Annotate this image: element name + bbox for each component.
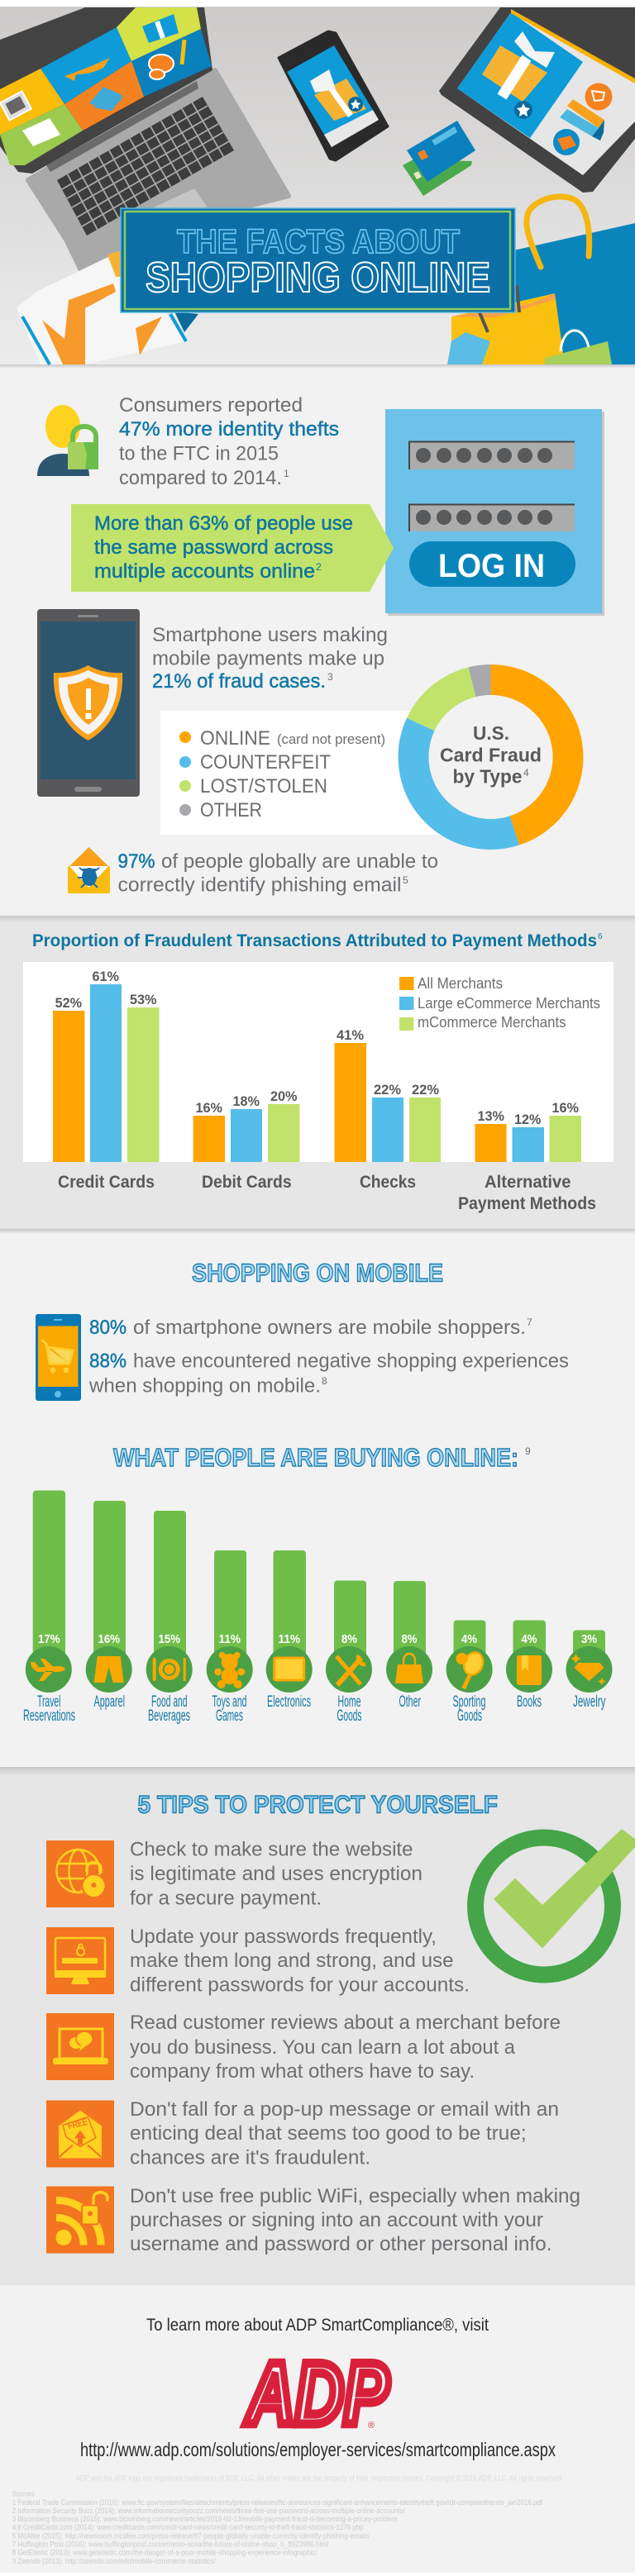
bar: apparel bbox=[86, 1501, 132, 1711]
group: checks: 22% bbox=[412, 1082, 439, 1098]
callout: password reuse arrow: the same password across bbox=[94, 536, 333, 559]
text: mobile payments fraud: Smartphone users making bbox=[152, 624, 388, 646]
tip text: chances are it's fraudulent. bbox=[130, 2147, 370, 2169]
text: identity thefts bbox=[119, 394, 339, 489]
text: identity thefts: 47% more identity thefts bbox=[119, 418, 339, 440]
tip text: you do business. You can learn a lot about a bbox=[130, 2036, 516, 2059]
tip text bbox=[130, 2185, 580, 2255]
bar: sporting goods: Sporting bbox=[453, 1693, 486, 1711]
tip text bbox=[130, 2098, 559, 2169]
icon: phone with warning shield bbox=[37, 609, 140, 797]
log in button: LOG IN bbox=[438, 548, 545, 584]
text: identity thefts: Consumers reported bbox=[119, 394, 303, 417]
bar: toys: 11% bbox=[218, 1632, 241, 1646]
heading: shopping on mobile: SHOPPING ON MOBILE bbox=[192, 1258, 443, 1288]
panel: card fraud legend: LOST/STOLEN bbox=[200, 775, 327, 798]
text: phishing: of people globally are unable to bbox=[161, 850, 438, 873]
panel: card fraud legend: ONLINE bbox=[200, 727, 270, 750]
tip 5 bbox=[46, 2185, 580, 2255]
bar: toys: Toys and bbox=[212, 1693, 246, 1711]
text: sources: 8 GetElastic (2013): www.getelastic.com/the-danger-of-a-poor-mobile-shopping-experience-infographic/ bbox=[12, 2549, 318, 2558]
donut chart: US card fraud by type bbox=[413, 679, 568, 834]
donut chart: US card fraud by type: Card Fraud bbox=[440, 744, 542, 765]
donut chart: US card fraud by type: by Type bbox=[453, 765, 523, 787]
group: alternative payment methods: 13% bbox=[478, 1108, 504, 1124]
bar: toys bbox=[207, 1550, 253, 1725]
bar: jewelry: Jewelry bbox=[573, 1693, 606, 1711]
bar: electronics bbox=[266, 1550, 313, 1711]
text: identity thefts: compared to 2014. bbox=[119, 467, 282, 489]
heading: proportion of fraudulent transactions: Proportion of Fraudulent Transactions Attributed to Payment Methods bbox=[32, 931, 597, 950]
title line 1: THE FACTS ABOUT bbox=[177, 222, 460, 260]
heading: what people are buying online: 9 bbox=[525, 1445, 531, 1457]
group: debit cards: Debit Cards bbox=[202, 1173, 292, 1192]
bar: home goods bbox=[326, 1580, 372, 1725]
text: identity thefts: 1 bbox=[284, 468, 289, 479]
group: credit cards: Credit Cards bbox=[58, 1173, 155, 1192]
tablet bbox=[439, 7, 635, 193]
group: alternative payment methods: Payment Methods bbox=[458, 1194, 596, 1213]
tip text: company from what others have to say. bbox=[130, 2060, 475, 2083]
password field 2 bbox=[408, 504, 575, 531]
bar: travel: Travel bbox=[37, 1693, 61, 1711]
bar: travel bbox=[23, 1491, 75, 1725]
group: credit cards: 53% bbox=[130, 992, 157, 1007]
group: credit cards: 61% bbox=[93, 969, 119, 984]
text: mobile shoppers: 80% bbox=[89, 1317, 127, 1339]
bar: home goods: Home bbox=[337, 1693, 360, 1711]
login panel bbox=[385, 409, 604, 616]
logo: ADP: ADP bbox=[245, 2344, 389, 2443]
tip text: Don't fall for a pop-up message or email with an bbox=[130, 2098, 559, 2121]
bar: books bbox=[506, 1620, 552, 1711]
bar: books: 4% bbox=[521, 1632, 537, 1646]
bar: food: Beverages bbox=[148, 1707, 190, 1725]
group: checks: 22% bbox=[374, 1082, 401, 1098]
text: mobile shoppers: 7 bbox=[527, 1317, 532, 1328]
icon: wifi with open lock bbox=[46, 2187, 114, 2253]
tip text: enticing deal that seems too good to be true; bbox=[130, 2122, 527, 2145]
text: phishing: 97% bbox=[117, 850, 155, 873]
bar chart: payment methods bbox=[23, 962, 614, 1213]
log in button bbox=[409, 541, 575, 587]
group: checks: Checks bbox=[360, 1173, 416, 1192]
group: credit cards bbox=[53, 969, 159, 1192]
heading: proportion of fraudulent transactions: 6 bbox=[598, 932, 603, 941]
tip text bbox=[130, 2012, 561, 2083]
text: learn more: To learn more about ADP SmartCompliance®, visit bbox=[146, 2316, 489, 2335]
group: alternative payment methods: 16% bbox=[552, 1100, 579, 1116]
text: mobile payments fraud: 3 bbox=[327, 671, 333, 683]
icon: phone with cart bbox=[36, 1314, 81, 1401]
bar: other: Other bbox=[399, 1693, 421, 1711]
text: sources: 2 Information Security Buzz (2014): www.informationsecuritybuzz.com/news/three-five-use-password-across-multiple-online-accounts/ bbox=[12, 2507, 405, 2516]
donut chart: US card fraud by type: U.S. bbox=[473, 722, 509, 744]
icon: green check bbox=[475, 1829, 635, 1975]
bar: food bbox=[146, 1511, 193, 1725]
bar: home goods: Goods bbox=[337, 1707, 362, 1725]
text: phishing: 5 bbox=[403, 874, 408, 886]
text: mobile shoppers: 88% bbox=[89, 1350, 127, 1372]
credit cards bbox=[403, 121, 475, 196]
group: credit cards: 52% bbox=[55, 995, 82, 1011]
text: sources bbox=[12, 2490, 542, 2566]
shoe box bbox=[17, 250, 198, 364]
text: identity thefts: to the FTC in 2015 bbox=[119, 443, 279, 464]
icon: free offer envelope: FREE bbox=[66, 2116, 88, 2131]
chart legend: mCommerce Merchants bbox=[418, 1014, 566, 1031]
icon: globe and lock bbox=[46, 1840, 114, 1907]
bar: sporting goods bbox=[446, 1620, 493, 1725]
icon: free offer envelope bbox=[46, 2101, 114, 2167]
text: mobile shoppers: have encountered negative shopping experiences bbox=[133, 1350, 569, 1372]
group: alternative payment methods: 12% bbox=[514, 1112, 541, 1127]
tip text: for a secure payment. bbox=[130, 1888, 322, 1910]
bar: toys: Games bbox=[216, 1707, 243, 1725]
title banner bbox=[121, 208, 515, 312]
tip text bbox=[130, 1839, 423, 1910]
panel: card fraud legend: OTHER bbox=[200, 799, 262, 821]
chart legend bbox=[399, 975, 600, 1031]
callout: password reuse arrow bbox=[71, 504, 394, 592]
text: mobile shoppers: 8 bbox=[322, 1375, 327, 1387]
tip 4 bbox=[46, 2098, 559, 2169]
donut chart: US card fraud by type: 4 bbox=[523, 767, 529, 779]
bar: other bbox=[386, 1581, 432, 1711]
bar: jewelry: 3% bbox=[581, 1632, 597, 1646]
text: mobile shoppers bbox=[88, 1317, 569, 1397]
logo: ADP: ® bbox=[368, 2421, 375, 2431]
text: sources: 3 Bloomberg Business (2015): www.bloomberg.com/news/articles/2015-02-13/mobile-payment-fraud-is-becoming-a-pricey-problem bbox=[12, 2515, 398, 2524]
bar chart: what people are buying bbox=[23, 1491, 612, 1725]
text: mobile payments fraud bbox=[152, 624, 388, 693]
group: debit cards: 16% bbox=[195, 1100, 222, 1116]
group: debit cards bbox=[193, 1088, 299, 1192]
tip text: Update your passwords frequently, bbox=[130, 1926, 437, 1948]
bar: sporting goods: 4% bbox=[461, 1632, 477, 1646]
tip text: Read customer reviews about a merchant before bbox=[130, 2012, 561, 2034]
chart legend: All Merchants bbox=[418, 975, 503, 992]
tip text: purchases or signing into an account with your bbox=[130, 2209, 543, 2231]
icon: phishing email bbox=[68, 847, 110, 893]
header illustration bbox=[0, 7, 635, 369]
group: checks bbox=[334, 1027, 441, 1192]
tip text: Check to make sure the website bbox=[130, 1839, 413, 1861]
panel: card fraud legend: COUNTERFEIT bbox=[200, 751, 331, 774]
icon: monitor with lock bbox=[46, 1927, 114, 1994]
group: checks: 41% bbox=[337, 1027, 364, 1043]
bar: books: Books bbox=[517, 1693, 542, 1711]
tip text: is legitimate and uses encryption bbox=[130, 1863, 423, 1885]
callout: password reuse arrow: More than 63% of people use bbox=[94, 512, 353, 535]
bar: electronics: Electronics bbox=[267, 1693, 311, 1711]
bar: sporting goods: Goods bbox=[457, 1707, 482, 1725]
shopping bags bbox=[447, 197, 635, 364]
callout: password reuse arrow: multiple accounts online bbox=[94, 560, 315, 583]
text: mobile payments fraud: 21% of fraud cases. bbox=[152, 670, 326, 693]
bar: food: Food and bbox=[151, 1693, 187, 1711]
tip text: Don't use free public WiFi, especially when making bbox=[130, 2185, 580, 2207]
text: mobile shoppers: of smartphone owners are mobile shoppers. bbox=[133, 1317, 526, 1339]
bar: apparel: 16% bbox=[98, 1632, 120, 1646]
heading: what people are buying online: WHAT PEOPLE ARE BUYING ONLINE: bbox=[113, 1443, 518, 1472]
heading: 5 tips: 5 TIPS TO PROTECT YOURSELF bbox=[137, 1792, 498, 1818]
panel: card fraud legend bbox=[160, 711, 442, 835]
title line 2: SHOPPING ONLINE bbox=[146, 254, 490, 301]
group: debit cards: 20% bbox=[270, 1088, 298, 1104]
text: sources: 7 Huffington Post (2016): www.huffingtonpost.com/ernesto-sosa/the-future-of-online-shop_b_8923986.html bbox=[12, 2540, 328, 2550]
group: alternative payment methods bbox=[458, 1100, 596, 1213]
tip text: username and password or other personal info. bbox=[130, 2233, 552, 2255]
text: mobile payments fraud: mobile payments make up bbox=[152, 648, 384, 669]
tip 1 bbox=[46, 1839, 423, 1910]
icon: laptop with speech bubbles bbox=[46, 2013, 114, 2080]
phone bbox=[279, 31, 388, 160]
group: debit cards: 18% bbox=[233, 1093, 260, 1109]
chart legend: Large eCommerce Merchants bbox=[418, 995, 600, 1012]
panel: card fraud legend: (card not present) bbox=[277, 731, 385, 747]
bar: other: 8% bbox=[402, 1632, 417, 1646]
bar: jewelry bbox=[566, 1630, 612, 1711]
text: sources: 1 Federal Trade Commission (2016): www.ftc.gov/system/files/attachments/press-releases/ftc-announces-significant-enhancements-identitytheft.gov/idt-complainttrends_jan2016.pdf bbox=[12, 2498, 542, 2507]
text: mobile shoppers: when shopping on mobile. bbox=[88, 1375, 321, 1397]
tip text: different passwords for your accounts. bbox=[130, 1974, 470, 1996]
tip text bbox=[130, 1926, 470, 1996]
group: alternative payment methods: Alternative bbox=[485, 1173, 571, 1192]
text: sources: 9 Zeendo (2013): http://zeendo.com/info/mobile-commerce-statistics/ bbox=[12, 2557, 216, 2566]
bar: home goods: 8% bbox=[341, 1632, 357, 1646]
tip text: make them long and strong, and use bbox=[130, 1950, 453, 1972]
bar: electronics: 11% bbox=[278, 1632, 300, 1646]
text: sources: 4,6 CreditCards.com (2014): www.creditcards.com/credit-card-news/credit-card-security-id-theft-fraud-statistics-1276.php bbox=[12, 2523, 364, 2532]
password field 1 bbox=[408, 441, 575, 469]
bar: travel: 17% bbox=[38, 1632, 60, 1646]
callout: password reuse arrow: 2 bbox=[316, 561, 322, 573]
text: phishing bbox=[117, 850, 438, 896]
tip 2 bbox=[46, 1926, 470, 1996]
text: sources: Sources: bbox=[12, 2490, 36, 2499]
bar: travel: Reservations bbox=[23, 1707, 75, 1725]
laptop bbox=[0, 7, 289, 270]
text: sources: 5 McAfee (2015): http://newsroom.mcafee.com/press-release/97-people-globally-unable-correctly-identify-phishing-emails bbox=[12, 2531, 370, 2540]
bar: apparel: Apparel bbox=[94, 1693, 125, 1711]
tip 3 bbox=[46, 2012, 561, 2083]
text: phishing: correctly identify phishing email bbox=[117, 874, 402, 896]
icon: identity theft person bbox=[37, 405, 98, 476]
bar: food: 15% bbox=[159, 1632, 180, 1646]
